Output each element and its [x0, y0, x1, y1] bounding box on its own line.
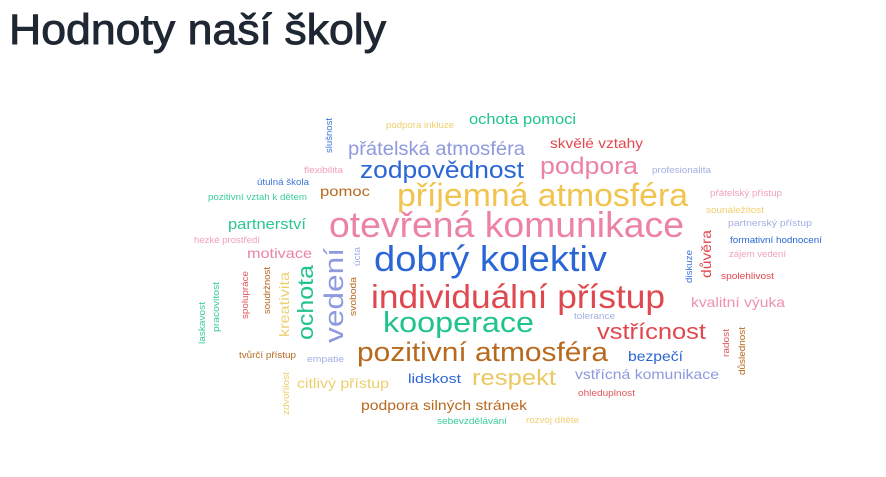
medium words: kvalitní výuka: [691, 294, 785, 310]
vertical words: slušnost: [324, 118, 335, 153]
small words: pozitivní vztah k dětem: [208, 192, 307, 203]
small words: flexibilita: [304, 165, 344, 176]
vertical words: diskuze: [684, 250, 695, 283]
large words: dobrý kolektiv: [374, 238, 607, 279]
large words: otevřená komunikace: [329, 204, 684, 245]
medium words: pomoc: [320, 183, 370, 199]
medium words: citlivý přístup: [297, 375, 389, 391]
large words: individuální přístup: [371, 278, 665, 315]
vertical words: úcta: [352, 247, 362, 266]
vertical words: vedení: [319, 247, 349, 343]
title: Hodnoty naší školy: [9, 6, 387, 54]
large words: podpora: [540, 153, 639, 180]
small words: tolerance: [574, 311, 615, 322]
medium words: lidskost: [408, 371, 461, 386]
vertical words: ochota: [293, 264, 318, 340]
word cloud: [194, 111, 822, 427]
large words: respekt: [472, 365, 556, 390]
medium words: skvělé vztahy: [550, 135, 643, 151]
medium words: bezpečí: [628, 348, 683, 364]
vertical words: důslednost: [737, 327, 748, 375]
vertical words: zdvořilost: [281, 372, 292, 415]
vertical words: spolupráce: [240, 271, 251, 319]
small words: rozvoj dítěte: [526, 415, 579, 426]
medium words: partnerství: [228, 216, 307, 233]
large words: pozitivní atmosféra: [357, 337, 609, 367]
small words: sounáležitost: [706, 205, 764, 216]
large words: zodpovědnost: [360, 157, 524, 184]
small words: tvůrčí přístup: [239, 350, 296, 361]
small words: empatie: [307, 354, 344, 365]
small words: zájem vedení: [729, 249, 786, 260]
vertical words: kreativita: [276, 272, 292, 337]
small words: [194, 120, 822, 427]
vertical words: radost: [721, 329, 732, 357]
small words: spolehlivost: [721, 271, 774, 282]
medium words: [228, 111, 785, 413]
small words: profesionalita: [652, 165, 712, 176]
medium words: ochota pomoci: [469, 111, 576, 128]
small words: ohleduplnost: [578, 388, 635, 399]
small words: hezké prostředí: [194, 235, 260, 246]
small words: formativní hodnocení: [730, 235, 822, 246]
medium words: podpora silných stránek: [361, 397, 528, 413]
small words: podpora inkluze: [386, 120, 454, 131]
small words: partnerský přístup: [728, 218, 812, 229]
large words: příjemná atmosféra: [397, 177, 688, 213]
vertical words: [197, 118, 748, 415]
large words: kooperace: [383, 307, 534, 339]
large words: přátelská atmosféra: [348, 139, 525, 160]
vertical words: soudržnost: [262, 267, 273, 314]
small words: přátelský přístup: [710, 188, 782, 199]
vertical words: svoboda: [348, 276, 359, 316]
small words: útulná škola: [257, 177, 310, 188]
large words: [329, 139, 706, 390]
medium words: vstřícná komunikace: [575, 366, 719, 382]
vertical words: pracovitost: [211, 282, 222, 332]
medium words: motivace: [247, 245, 312, 261]
small words: sebevzdělávání: [437, 416, 507, 427]
vertical words: důvěra: [698, 230, 714, 278]
vertical words: laskavost: [197, 302, 208, 344]
large words: vstřícnost: [597, 319, 706, 344]
